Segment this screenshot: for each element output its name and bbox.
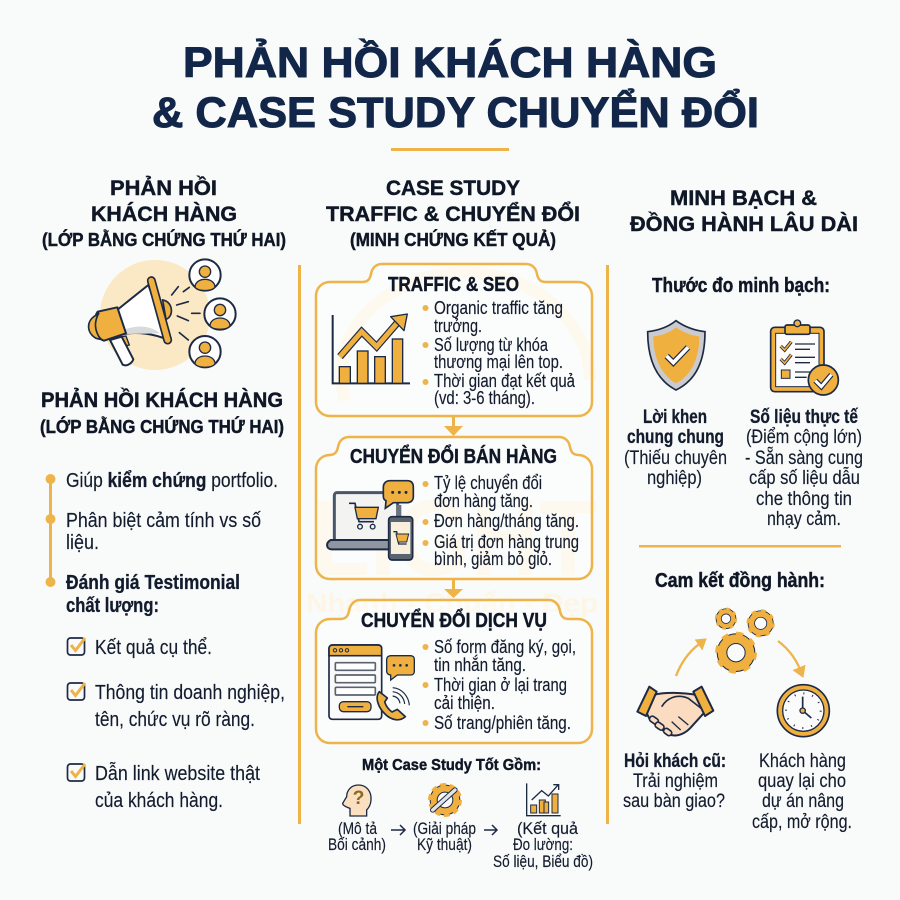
- text: ask old clients: Trải nghiệm: [633, 771, 718, 792]
- case study step labels: Đo lường:: [513, 836, 573, 854]
- panel: service conversion: tin nhắn tăng.: [434, 654, 526, 675]
- title: PHẢN HỒI KHÁCH HÀNG: [183, 38, 717, 87]
- column heading: left: (LỚP BẰNG CHỨNG THỨ HAI): [42, 229, 286, 250]
- text: generic praise: chung chung: [627, 427, 724, 448]
- text: generic praise: (Thiếu chuyên: [624, 448, 727, 469]
- timeline list: [46, 469, 278, 617]
- arrow: handshake to gears: [676, 639, 706, 676]
- panel: traffic and seo: Thời gian đạt kết quả: [434, 370, 576, 391]
- text: returning clients: Khách hàng: [759, 751, 846, 772]
- column heading: right: [630, 186, 858, 236]
- checklist: Kết quả cụ thể.: [95, 636, 212, 659]
- column heading: middle: (MINH CHỨNG KẾT QUẢ): [350, 229, 556, 250]
- title: & CASE STUDY CHUYỂN ĐỔI: [152, 87, 759, 137]
- text: returning clients: cấp, mở rộng.: [752, 812, 852, 833]
- subheading: left: PHẢN HỒI KHÁCH HÀNG: [41, 387, 283, 412]
- column heading: middle: CASE STUDY: [386, 176, 520, 200]
- arrow: traffic to sales: [444, 416, 463, 436]
- watermark: [306, 272, 598, 618]
- panel: service conversion: [316, 600, 592, 743]
- case study step labels: [328, 820, 593, 871]
- arrows: case study steps: [391, 825, 497, 835]
- panel: sales conversion: Giá trị đơn hàng trung: [434, 531, 579, 552]
- icon: head with question mark: [343, 785, 371, 816]
- panel: sales conversion: [316, 437, 592, 579]
- checklist: [68, 636, 285, 812]
- checklist: tên, chức vụ rõ ràng.: [95, 708, 255, 731]
- icon: gears: [717, 609, 773, 671]
- arrow: sales to services: [444, 579, 463, 598]
- panel: traffic and seo: thương mại lên top.: [434, 351, 563, 372]
- icon: laptop and phone shopping: [327, 481, 413, 560]
- panel: sales conversion: đơn hàng tăng.: [434, 490, 533, 511]
- text: real metrics: (Điểm cộng lớn): [746, 427, 862, 448]
- panel: traffic and seo: TRAFFIC & SEO: [388, 273, 519, 296]
- arrow: gears to clock: [778, 641, 805, 677]
- case study step labels: (Giải pháp: [413, 820, 476, 838]
- text: real metrics: cấp số liệu dẫu: [749, 467, 860, 489]
- text: returning clients: quay lại cho: [758, 771, 846, 792]
- case study step labels: Số liệu, Biểu đồ): [493, 853, 593, 871]
- text: generic praise: Lời khen: [643, 407, 707, 428]
- heading: a good case study: Một Case Study Tốt Gồm:: [362, 757, 541, 774]
- column heading: left: KHÁCH HÀNG: [91, 201, 237, 226]
- text: real metrics: Số liệu thực tế: [750, 407, 858, 428]
- subheading: left: [40, 387, 284, 437]
- column heading: left: [42, 175, 286, 250]
- text: ask old clients: sau bàn giao?: [623, 791, 725, 812]
- watermark: Nhanh - Chuẩn - Đẹp: [306, 588, 598, 618]
- panel: sales conversion: Tỷ lệ chuyển đổi: [434, 472, 542, 493]
- case study step labels: (Kết quả: [517, 820, 579, 838]
- panel: service conversion: CHUYỂN ĐỔI DỊCH VỤ: [361, 608, 547, 632]
- timeline list: Đánh giá Testimonial: [66, 571, 240, 594]
- text: real metrics: nhạy cảm.: [767, 509, 841, 530]
- panel: service conversion: Số form đăng ký, gọi,: [434, 636, 576, 657]
- icon: clock: [777, 685, 829, 737]
- panel: service conversion: Số trang/phiên tăng.: [434, 712, 571, 733]
- checklist: của khách hàng.: [95, 789, 223, 812]
- panel: traffic and seo: (vd: 3-6 tháng).: [434, 387, 535, 408]
- timeline list: chất lượng:: [66, 594, 159, 617]
- icon: growth chart: [333, 314, 410, 383]
- column heading: middle: TRAFFIC & CHUYỂN ĐỔI: [326, 201, 580, 226]
- icon: megaphone with customers: [89, 259, 236, 370]
- text: ask old clients: Hỏi khách cũ:: [624, 751, 726, 772]
- title: [152, 38, 759, 137]
- case study step labels: Kỹ thuật): [417, 836, 472, 854]
- text: returning clients: [752, 751, 852, 833]
- column heading: right: MINH BẠCH &: [670, 186, 817, 210]
- panel: sales conversion: bình, giảm bỏ giỏ.: [434, 548, 552, 569]
- checklist: Thông tin doanh nghiệp,: [95, 681, 285, 704]
- icon: handshake: [637, 687, 713, 737]
- timeline list: liệu.: [66, 531, 99, 554]
- case study step labels: (Mô tả: [338, 820, 378, 838]
- panel: traffic and seo: trưởng.: [434, 315, 482, 336]
- icon: head with question mark: ?: [353, 788, 364, 809]
- panel: service conversion: Thời gian ở lại trang: [434, 674, 567, 695]
- icon: form and phone: [329, 645, 414, 720]
- case study step labels: Bối cảnh): [328, 836, 386, 854]
- icon: small result chart: [527, 783, 561, 816]
- text: generic praise: nghiệp): [647, 468, 702, 489]
- subheading: left: (LỚP BẰNG CHỨNG THỨ HAI): [40, 416, 284, 437]
- heading: transparency metrics: Thước đo minh bạch:: [652, 275, 830, 297]
- panel: traffic and seo: [316, 264, 592, 416]
- column heading: right: ĐỒNG HÀNH LÂU DÀI: [630, 211, 858, 236]
- timeline list: Phân biệt cảm tính vs số: [66, 509, 261, 532]
- timeline list: Giúp kiểm chứng portfolio.: [66, 469, 278, 492]
- panel: service conversion: cải thiện.: [434, 692, 495, 713]
- icon: gear and wrench: [431, 786, 459, 814]
- checklist: Dẫn link website thật: [95, 762, 260, 785]
- text: generic praise: [624, 407, 727, 489]
- watermark: LIGHT: [312, 477, 597, 598]
- panel: traffic and seo: Organic traffic tăng: [434, 297, 563, 318]
- panel: sales conversion: Đơn hàng/tháng tăng.: [434, 510, 579, 531]
- icon: clipboard checklist: [771, 320, 838, 395]
- column heading: left: PHẢN HỒI: [110, 175, 217, 200]
- heading: partnership commitment: Cam kết đồng hành:: [655, 570, 825, 592]
- text: real metrics: - Sẵn sàng cung: [745, 448, 863, 469]
- text: returning clients: dự án nâng: [762, 791, 844, 812]
- text: ask old clients: [623, 751, 726, 812]
- icon: shield: [648, 321, 705, 390]
- panel: sales conversion: CHUYỂN ĐỔI BÁN HÀNG: [350, 444, 557, 468]
- text: real metrics: [745, 407, 863, 530]
- text: real metrics: che thông tin: [756, 489, 852, 510]
- column heading: middle: [326, 176, 580, 250]
- panel: traffic and seo: Số lượng từ khóa: [434, 334, 549, 355]
